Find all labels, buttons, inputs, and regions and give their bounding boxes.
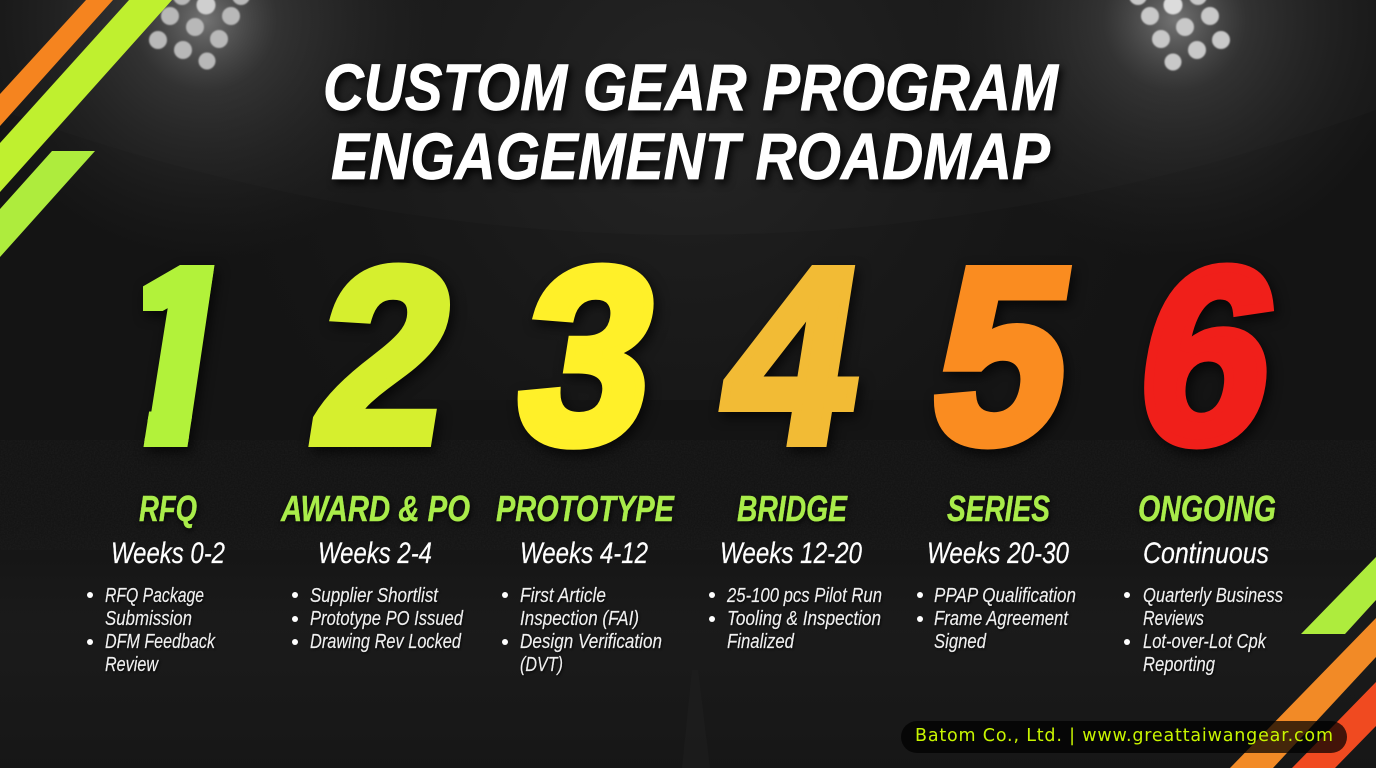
bullet list: Signed — [934, 630, 986, 653]
bottom-right diagonal accent stripes — [1230, 557, 1376, 768]
heading: Prototype: PROTOTYPE — [496, 488, 675, 529]
panel: step 5 Series — [916, 216, 1091, 653]
bullet list: DFM Feedback — [105, 630, 216, 653]
timing: Weeks 4-12: Weeks 4-12 — [520, 537, 648, 570]
number 2: 2 — [297, 216, 472, 495]
panel: step 1 RFQ — [87, 265, 225, 672]
timing: Weeks 12-20: Weeks 12-20 — [720, 537, 862, 570]
bullet list: (DVT) — [520, 653, 563, 676]
icon: right stadium floodlight — [916, 0, 1376, 270]
timing: Weeks 0-2: Weeks 0-2 — [111, 537, 225, 570]
bullet list: Inspection (FAI) — [520, 607, 639, 630]
bullet list: Quarterly Business — [1143, 584, 1283, 607]
timing: Weeks 20-30: Weeks 20-30 — [927, 537, 1069, 570]
panel: step 2 Award & PO — [280, 216, 472, 653]
panel: step 6 Ongoing — [1121, 216, 1296, 676]
bullet list: Finalized — [727, 630, 794, 653]
icon: left stadium floodlight — [0, 0, 460, 270]
number 4: 4 — [706, 216, 881, 495]
footer company badge: Batom Co., Ltd. | www.greattaiwangear.com — [915, 726, 1333, 746]
number 6: 6 — [1121, 216, 1296, 495]
bullet list: Drawing Rev Locked — [310, 630, 461, 653]
heading: Award & PO: AWARD & PO — [280, 488, 470, 529]
title: ENGAGEMENT ROADMAP — [331, 119, 1051, 193]
bullet list: Prototype PO Issued — [310, 607, 463, 630]
footer company badge — [901, 721, 1347, 753]
heading: Bridge: BRIDGE — [737, 488, 848, 529]
heading: Series: SERIES — [947, 488, 1050, 529]
bullet list — [709, 584, 882, 653]
heading: Ongoing: ONGOING — [1138, 488, 1276, 529]
bullet list: RFQ Package — [105, 584, 204, 607]
number 1: 1 — [84, 216, 270, 495]
heading: RFQ: RFQ — [139, 488, 197, 529]
title — [323, 50, 1060, 193]
bullet list: Tooling & Inspection — [727, 607, 881, 630]
bullet list — [502, 584, 662, 676]
bullet list — [1124, 584, 1283, 676]
bullet list: Frame Agreement — [934, 607, 1069, 630]
timing: Continuous: Continuous — [1143, 537, 1269, 570]
bullet list: First Article — [520, 584, 606, 607]
number 5: 5 — [916, 216, 1091, 495]
bullet list: Design Verification — [520, 630, 662, 653]
bullet list — [87, 584, 216, 676]
top-left diagonal accent stripes — [0, 0, 172, 257]
bullet list: Reviews — [1143, 607, 1204, 630]
number 3: 3 — [501, 216, 676, 495]
bullet list: PPAP Qualification — [934, 584, 1076, 607]
bullet list: 25-100 pcs Pilot Run — [726, 584, 882, 607]
title: CUSTOM GEAR PROGRAM — [323, 50, 1060, 124]
bullet list: Supplier Shortlist — [310, 584, 439, 607]
bullet list — [292, 584, 463, 653]
panel: step 3 Prototype — [496, 216, 676, 676]
timing: Weeks 2-4: Weeks 2-4 — [318, 537, 432, 570]
bullet list — [917, 584, 1076, 653]
panel: step 4 Bridge — [706, 216, 882, 653]
bullet list: Submission — [105, 607, 192, 630]
bullet list: Review — [105, 653, 159, 676]
bullet list: Reporting — [1143, 653, 1215, 676]
bullet list: Lot-over-Lot Cpk — [1143, 630, 1267, 653]
